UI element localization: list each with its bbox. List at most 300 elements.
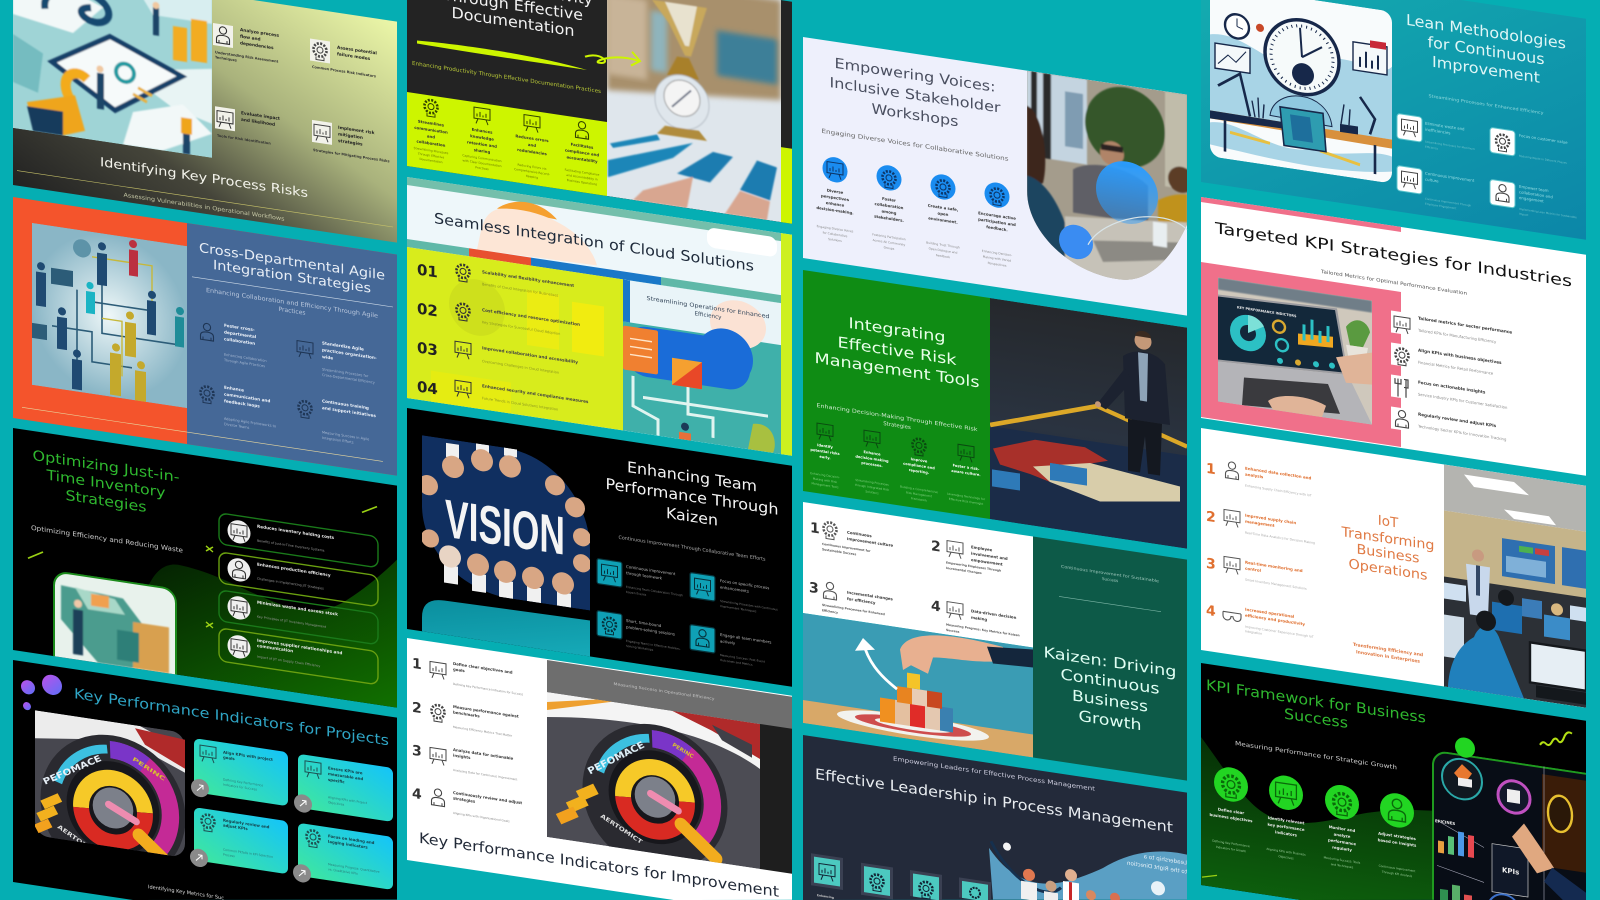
list card: minimizes waste: Key Principles of JIT Inventory Management [257,615,327,629]
title: Enhancing Team [627,458,757,495]
image: cloud and pipelines: Efficiency [695,311,722,321]
item: continuous culture: Continuous Improvement Through [1425,197,1471,208]
list item 01: Scalability and flexibility enhancement [482,269,574,288]
item 2: Empowering Employees Through [946,560,1001,573]
card: ensure KPIs: Objectives [328,800,345,807]
image: control room photo [1444,464,1586,708]
column: identify risks: Identify [817,443,834,450]
list card: reduces inventory: Reduces inventory holding costs [257,524,335,540]
column: monitor performance: and Techniques [1331,862,1354,869]
card: ensure KPIs [294,753,393,826]
image: performance gauge [547,692,760,869]
list card: enhances production [219,552,378,607]
green dot [1455,736,1475,759]
column: foster collaboration: collaboration [875,201,904,210]
item: align KPIs [1391,342,1502,381]
title: Identifying Key Process Risks [100,154,308,200]
item 4: 4 [1206,603,1216,620]
title: Kaizen: Driving [1044,643,1176,681]
step icon 4 [959,877,991,900]
brush underline [417,39,587,70]
list card: improves supplier relationships: Impact of JIT on Supply Chain Efficiency [257,655,320,668]
item: empower team: collaboration and [1519,189,1553,199]
illustration: leaders [989,824,1187,900]
item 2 [412,698,519,739]
slide: Cloud Integration [407,177,792,457]
column: improve compliance: Risk Management [906,490,933,498]
column: foster risk culture: Effective Risk Oversight [949,497,984,506]
item: continuous culture: culture [1425,177,1439,184]
item: continuous training: and support initiatives [322,405,376,418]
item: enhance communication: Enhance [224,385,244,393]
bubbles [1059,151,1187,276]
item: tailored metrics: Tailored metrics for sector performance [1418,316,1512,335]
subtitle: Enhancing Productivity Through Effective Documentation Practices [412,61,601,95]
item: eliminate waste: Eliminate waste and [1425,121,1465,132]
list item 04: Future Trends in Cloud Solutions Integration [482,396,558,412]
item 3 [1206,554,1307,591]
title: Empowering Voices: [835,56,996,96]
item 4: 4 [931,598,941,616]
list card: reduces inventory: Benefits of Just-in-Time Inventory Systems [257,539,325,553]
item: focus on enhancements [690,572,778,617]
title [433,0,593,43]
column: foster collaboration: Across All Community [873,238,906,247]
title: Performance Through [606,475,778,519]
item 1: Sustainable Success [822,547,856,556]
item: eliminate waste [1397,113,1475,156]
title: Effective Leadership in Process Management [815,766,1173,837]
title [606,455,778,539]
column: identify risks: early. [819,455,831,460]
item: foster collaboration [200,319,267,369]
column: diverse perspectives: Engaging Diverse Voices [817,224,854,234]
item: continuous improvement: Kaizen Events [626,590,647,597]
slide: KPIs for Projects [13,660,397,900]
item 2: Improved supply chain [1245,513,1296,525]
item: assess failure modes: Assess potential [337,45,377,57]
item 1: improvement culture [847,536,893,548]
item: customer value: Focus on customer value [1519,133,1568,145]
card: regularly review: Process [223,853,235,858]
title: Success [1284,706,1348,732]
column: diverse perspectives: Diverse [827,188,844,195]
column: active participation: participation and [978,217,1016,227]
item: implement mitigation: strategies [338,138,363,148]
item 4: Increased operational [1245,607,1295,619]
card: ensure KPIs: measurable and [328,771,363,781]
card: focus on indicators: Measuring Progress: Quantitative [328,862,380,874]
item: analyze process flow: Analyze process [240,27,280,39]
image: isometric process documents [13,0,212,158]
column: reduces errors: Keeping [526,174,538,180]
title: Documentation [451,4,574,40]
item: actionable insights: Focus on actionable insights [1418,380,1486,395]
item: eliminate waste: Efficiency [1425,145,1438,151]
card: focus on indicators: Focus on leading and [328,833,375,845]
column: identify risks: Management Tools [811,481,839,489]
item: assess failure modes: Common Process Risk Indicators [312,65,376,78]
item: engage team: Measuring Success: Post-Event [720,653,766,664]
column: active participation: Encourage active [978,210,1016,221]
card: focus on indicators [293,822,393,896]
item 3: Analyzing Data for Continuous Improvement [453,768,518,782]
mirrored caption: Leadership to a [1144,854,1187,867]
subtitle [1061,564,1160,589]
column: reduces errors: Comprehensive Record- [514,167,550,176]
item 3: Streamlining Processes for Enhanced [822,603,885,616]
list item 04: Enhanced security and compliance measures [482,383,589,404]
list item 04: 04 [417,378,438,399]
item: empower team: Implementing Lean Metrics for Sustainable [1519,207,1577,219]
column: reduces errors: redundancies [517,147,547,156]
card: ensure KPIs: Aligning KPIs with Project [328,795,368,805]
step icon 1 [811,853,843,900]
item 1: Enhancing Supply Chain Efficiency with IoT [1245,484,1312,498]
column: define objectives: Indicators for Growth [1216,845,1246,853]
column: improve compliance: Building a Comprehensive [900,485,938,494]
list item 02: 02 [417,300,438,321]
column: facilitates compliance [565,119,599,187]
title [1206,677,1426,744]
list card: improves supplier relationships: communication [257,643,293,653]
item: align KPIs: Financial Metrics for Retail Performance [1418,360,1494,376]
column: active participation [978,180,1016,269]
item 2: involvement and [971,551,1008,561]
column: foster collaboration: Fostering Participation [872,232,906,241]
item 4: Success [946,628,960,634]
item: continuous improvement: Continuous improvement [626,564,676,576]
column: safe environment [926,172,960,261]
column: foster risk culture [947,443,986,506]
image: performance gauge: PERINC [131,757,166,783]
list item 01 [417,258,574,302]
step icon 2 [861,863,893,900]
subtitle: Transforming Efficiency and [1353,642,1423,658]
item: actionable insights: Service Industry KPIs for Customer Satisfaction [1418,392,1508,410]
image: KPI dashboard laptop [1218,278,1372,424]
column: foster risk culture: Leveraging Technology for [947,492,986,501]
item: short sessions [597,610,680,656]
item: tailored metrics [1391,310,1512,351]
column: monitor performance: performance [1328,837,1356,846]
item: continuous training: Measuring Success in Agile [322,430,369,441]
column: enhances knowledge: sharing [474,147,490,155]
column: facilitates compliance: and Accountability in [566,173,598,182]
image: cloud and pipelines: Streamlining Operations for Enhanced [647,296,770,320]
item: standardize agile: Streamlining Processes for [322,367,369,378]
column: enhances knowledge: retention and [467,139,497,149]
card: regularly review: Common Pitfalls in KPI Selection [223,848,273,859]
column: active participation: Perspectives [988,261,1007,268]
item: align KPIs: Align KPIs with business objectives [1418,348,1502,365]
subtitle: Practices [278,306,306,317]
item 2: Incremental Changes [946,566,982,575]
column: streamlines communication: Streamlines [418,119,445,128]
column: safe environment: Open Dialogue and [929,246,957,255]
item 4: Aligning KPIs with Organizational Goals [453,811,510,823]
title: Business [1072,686,1148,716]
item: analyze process flow: Understanding Risk Assessment [215,50,279,64]
column: enhances knowledge: with Clear Documentation [462,158,502,168]
slide: Identifying Key Process Risks [13,0,397,243]
column: foster collaboration: Groups [884,245,895,251]
item 1: goals [453,667,465,673]
column: foster collaboration: stakeholders. [874,214,904,223]
item 4 [412,784,522,825]
item: continuous improvement [597,558,683,602]
image: performance gauge [35,710,185,859]
image: warehouse illustration [53,572,177,675]
slide: Effective Documentation [407,0,792,224]
subtitle [1353,642,1423,665]
item 1 [810,520,893,562]
slide: Risk Management Tools [803,270,1187,549]
list card: improves supplier relationships [219,628,378,685]
title: Improvement [1432,53,1540,87]
column: reduces errors: and [528,142,536,148]
list item 03: Improved collaboration and accessibility [482,345,578,365]
card: regularly review: Regularly review and [223,818,270,829]
list item 03 [417,336,578,381]
title [1406,11,1566,91]
item 3 [809,579,894,623]
title: Integrating [848,314,945,346]
column: monitor performance: Monitor and [1329,824,1355,833]
list item 01: Benefits of Cloud Integration for Businesses [482,282,559,298]
item: analyze process flow: Techniques [215,55,237,63]
column: identify KPIs: key performance [1268,822,1305,832]
card: align KPIs [191,738,288,810]
list card: improves supplier relationships: Improves supplier relationships and [257,638,342,655]
title: Key Performance Indicators for Projects [74,686,389,749]
subtitle: Innovation in Enterprises [1356,649,1420,665]
item 2: management [1245,519,1275,528]
column: streamlines communication: and [427,133,435,140]
image: hand stacking blocks [803,613,1033,758]
slide: Targeted KPI Strategies [1201,197,1586,476]
column: streamlines communication: Streamlining Processes [414,146,449,155]
column: streamlines communication: communication [414,125,448,135]
title [814,309,980,391]
item 2: 2 [1206,509,1216,526]
slide: Kaizen Continuous Growth [803,502,1187,781]
column: safe environment: Feedback [936,253,950,259]
image: neon KPI dashboard: KPIs [1502,865,1519,877]
subtitle: Enhancing Collaboration and Efficiency Through Agile [206,287,378,320]
title: Workshops [872,101,958,130]
column: active participation: Making with Varied [983,255,1011,263]
title: Operations [1348,556,1428,584]
column: identify risks: Making with Risk [813,476,837,484]
column: define objectives: Define clear [1218,807,1244,815]
title: Integration Strategies [213,258,371,297]
title: Strategies [65,488,146,516]
item: empower team: engagement [1519,195,1544,204]
title [1340,507,1434,585]
image: performance gauge: AERTOMICT [599,813,644,846]
column: facilitates compliance: accountability [566,154,598,164]
column: diverse perspectives: Solutions [828,237,842,243]
subtitle: Streamlining Processes for Enhanced Efficiency [1428,93,1544,115]
item 3 [412,741,518,782]
item: evaluate impact: and likelihood [241,117,275,128]
image: meeting photo [1027,70,1187,280]
item: continuous improvement: through teamwork [626,570,663,581]
step icon 1: Enhancing [817,893,834,900]
item: implement mitigation: Implement risk [338,125,375,136]
item: short sessions: problem-solving sessions [626,624,675,637]
item: analyze process flow: dependencies [240,40,274,51]
item: evaluate impact [215,106,280,147]
title [1044,643,1176,740]
title: Lean Methodologies [1406,11,1566,53]
column: foster collaboration [872,163,906,253]
column: diverse perspectives: enhance [826,200,845,208]
subtitle: Measuring Success in Operational Efficiency [614,681,715,701]
subtitle: Tailored Metrics for Optimal Performance Evaluation [1320,269,1467,297]
item 3: for efficiency [847,596,876,605]
item: empower team: Empower team [1519,184,1549,193]
title [199,241,385,299]
item: implement mitigation: Strategies for Mitigating Process Risks [313,148,390,163]
list card: enhances production: Enhances production efficiency [257,562,331,578]
column: improve compliance: reporting. [909,468,929,475]
item 3: 3 [412,743,422,760]
column: facilitates compliance: Facilitates [571,142,594,150]
item: empower team [1490,179,1577,224]
column: identify risks: potential risks [810,448,840,456]
column: streamlines communication: Through Effective [417,151,444,160]
column: identify KPIs: Identify relevant [1268,815,1304,826]
item 4: making [971,615,987,622]
column: improve compliance: Improve [911,457,928,464]
item 3: Real-time monitoring and [1245,560,1303,573]
column: safe environment: Create a safe, [928,203,959,212]
column: foster collaboration: among [882,208,897,216]
image: neon KPI dashboard: EFICINES [1435,818,1455,826]
column: enhance decision-making: Enhance [863,450,881,457]
column: safe environment: open [938,211,949,217]
item: short sessions: Engaging Teams in Effective Problem- [626,639,680,651]
item: continuous training: Continuous training [322,398,369,410]
item: enhance communication: Diverse Teams [224,422,250,430]
item: standardize agile: practices organization- [322,347,377,360]
title: Seamless Integration of Cloud Solutions [434,210,754,275]
column: define objectives [1210,764,1253,854]
card: align KPIs: Indicators for Success [223,783,257,792]
title: Management Tools [814,349,980,391]
subtitle: Optimizing Efficiency and Reducing Waste [31,524,183,554]
column: diverse perspectives: decision-making. [816,205,854,216]
item: continuous culture [1397,165,1475,213]
card: ensure KPIs: specific [328,777,345,784]
item: analyze process flow [213,23,280,69]
column: reduces errors: Reduces errors [515,133,549,143]
item: standardize agile [297,337,377,385]
item: foster collaboration: collaboration [224,336,255,346]
item: engage team: Outcomes and Metrics [720,658,753,667]
title [830,55,1001,137]
arrow [585,45,640,69]
item 3: control [1245,566,1262,573]
item 4: Data-driven decision [971,608,1017,620]
item 4 [931,598,1020,643]
item 4 [1206,601,1314,644]
item: standardize agile: wide [322,354,333,361]
item 3: 3 [1206,556,1216,573]
item: focus on enhancements: Streamlining Processes with Continuous [720,599,778,612]
title: Growth [1078,707,1142,734]
item: focus on enhancements: enhancements [720,584,749,594]
item 1: Continuous [847,530,872,538]
item: standardize agile: Cross-Departmental Efficiency [322,373,375,385]
card: focus on indicators: lagging indicators [328,839,368,850]
item: continuous training [298,395,376,448]
item: foster collaboration: departmental [224,329,257,339]
subtitle: Strategies [883,421,911,431]
image: person under clock sketch [1210,0,1392,182]
column: facilitates compliance: Business Operations [567,178,598,187]
item: continuous culture: Continuous improvement [1425,171,1475,183]
item: actionable insights [1391,374,1508,414]
list card: reduces inventory [219,513,378,568]
item 2: empowerment [971,557,1003,567]
column: facilitates compliance: Facilitating Compliance [565,168,599,177]
item: tailored metrics: Tailored KPIs for Manufacturing Efficiency [1417,327,1497,344]
item 2: Real-Time Data Analytics for Decision Making [1245,531,1315,545]
subtitle: Assessing Vulnerabilities in Operational Workflows [123,193,285,223]
title: Inclusive Stakeholder [829,75,1001,117]
column: diverse perspectives: for Collaborative [823,231,848,238]
column: enhance decision-making [855,429,889,497]
subtitle [816,403,979,441]
mirrored caption [1126,852,1187,876]
list item 03: 03 [417,339,438,360]
title: Kaizen [666,504,718,530]
card: align KPIs: Align KPIs with project [223,750,273,762]
image: cloud and pipelines [623,280,781,454]
subtitle: Continuous Improvement for Sustainable [1061,564,1160,583]
subtitle: Continuous Improvement Through Collaborative Team Efforts [618,535,766,563]
card: focus on indicators: vs. Qualitative KPIs [328,867,358,876]
list item 04 [417,374,589,421]
image: performance gauge: AERTOMICT [56,824,102,859]
item 2: Measuring Efficiency Metrics That Matter [453,725,513,738]
column: streamlines communication: collaboration [417,139,446,148]
item 1: Defining Key Performance Indicators for Success [453,682,524,696]
slide: KPI Framework [1201,663,1600,900]
column: safe environment: Building Trust Through [926,240,960,250]
item: continuous improvement: Enhancing Team Collaboration Through [626,585,683,597]
column: define objectives: Defining Key Performance [1212,839,1250,848]
item 4: Integration [1245,629,1262,636]
column: improve compliance [900,436,938,504]
title: Business [1356,541,1420,567]
column: reduces errors [514,113,550,181]
item 3: Incremental changes [847,590,894,602]
item 1: 1 [810,520,820,537]
slide: Cross-Departmental Agile [13,197,397,476]
column: foster risk culture: aware culture. [951,469,981,477]
column: foster risk culture: Foster a risk- [953,463,980,472]
list card: enhances production: Challenges in Implementing JIT Strategies [257,577,324,591]
item: evaluate impact: Evaluate impact [241,110,280,122]
item: foster collaboration: Foster cross- [224,323,255,332]
column: adjust strategies: Adjust strategies [1378,831,1417,841]
step icon 3 [910,870,942,900]
item: implement mitigation [312,120,390,163]
